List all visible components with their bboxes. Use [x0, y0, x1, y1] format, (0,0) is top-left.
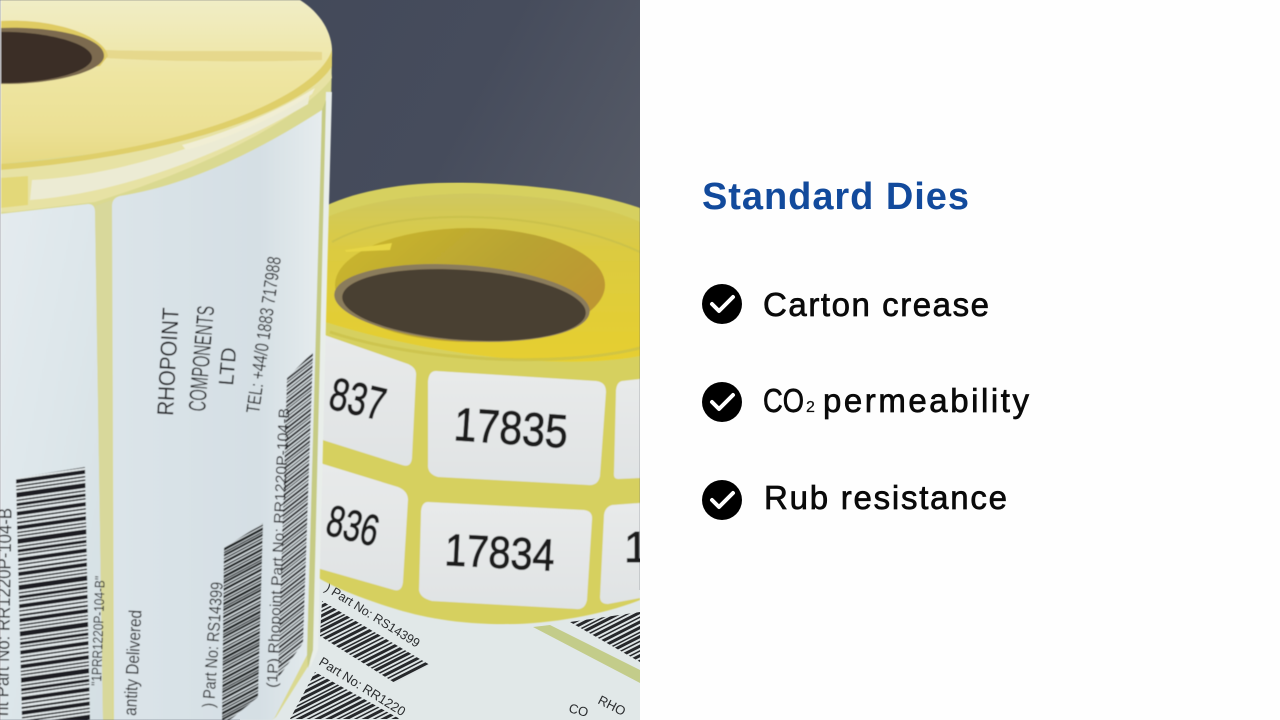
list item: Rub resistance: [702, 479, 1007, 520]
right edge highlight: [308, 92, 332, 668]
barcode: part number: [222, 523, 263, 720]
paper sheet with barcodes: CO: [567, 700, 590, 720]
roll side: [0, 60, 332, 720]
inner wall of the hole: [335, 228, 605, 342]
item label: Carton crease: [763, 286, 989, 323]
barcodes on big roll: [16, 352, 313, 720]
core rim: [0, 20, 108, 67]
printed label text: TEL: +44/0 1883 717988: [243, 255, 286, 415]
small roll: 17835: [452, 397, 570, 458]
big roll: [0, 0, 332, 720]
sheet text: ) Part No: RS14399: [322, 581, 422, 650]
cardboard core hole: [334, 264, 590, 342]
barcode: rhopoint part: [278, 352, 313, 678]
icon: check circle: [702, 284, 742, 324]
item label: CO: [763, 382, 804, 419]
left label: [0, 204, 103, 720]
small roll: 1: [624, 523, 648, 572]
small roll: [305, 183, 648, 624]
heading: Standard Dies: [702, 176, 969, 218]
item label: permeability: [823, 382, 1030, 419]
small roll: 17834: [443, 524, 556, 581]
number labels: [322, 334, 417, 466]
printed label text: (1P) Rhopoint Part No: RR1220P-104-B: [264, 408, 293, 688]
icon: check circle: [702, 480, 742, 520]
list item: Carton crease: [702, 284, 989, 324]
printed label text: COMPONENTS: [184, 305, 220, 413]
item label: Rub resistance: [764, 479, 1007, 516]
paper sheet with barcodes: [240, 578, 640, 720]
centre label: [112, 110, 322, 720]
printed label text: RHOPOINT: [152, 307, 184, 416]
roll top face: [305, 183, 640, 624]
small roll: 836: [322, 496, 384, 556]
printed label text: LTD: [215, 346, 241, 386]
ring lines: [332, 217, 640, 252]
label numbers: 837: [325, 367, 391, 430]
vertical gap: [95, 200, 112, 720]
printed label text: ) Part No: RS14399: [199, 581, 227, 708]
barcode: left label: [16, 467, 90, 720]
printed label text: antity Delivered: [120, 609, 146, 716]
background: [640, 0, 1280, 720]
item label: 2: [806, 399, 815, 416]
printed label text: [0, 255, 293, 716]
sheet barcodes: [320, 601, 430, 683]
printed label text: "1PRR1220P-104-B": [88, 576, 108, 686]
icon: check circle: [702, 382, 742, 422]
left edge: [0, 0, 1, 720]
roll top face: [0, 0, 332, 164]
top shoulder band: [0, 60, 332, 212]
paper sheet with barcodes: Part No: RR1220: [316, 654, 408, 719]
cardboard hole: [0, 28, 104, 84]
photo: label rolls: [0, 0, 648, 720]
paper sheet with barcodes: RHO: [596, 692, 628, 719]
list item: CO2 permeability: [702, 382, 1030, 422]
